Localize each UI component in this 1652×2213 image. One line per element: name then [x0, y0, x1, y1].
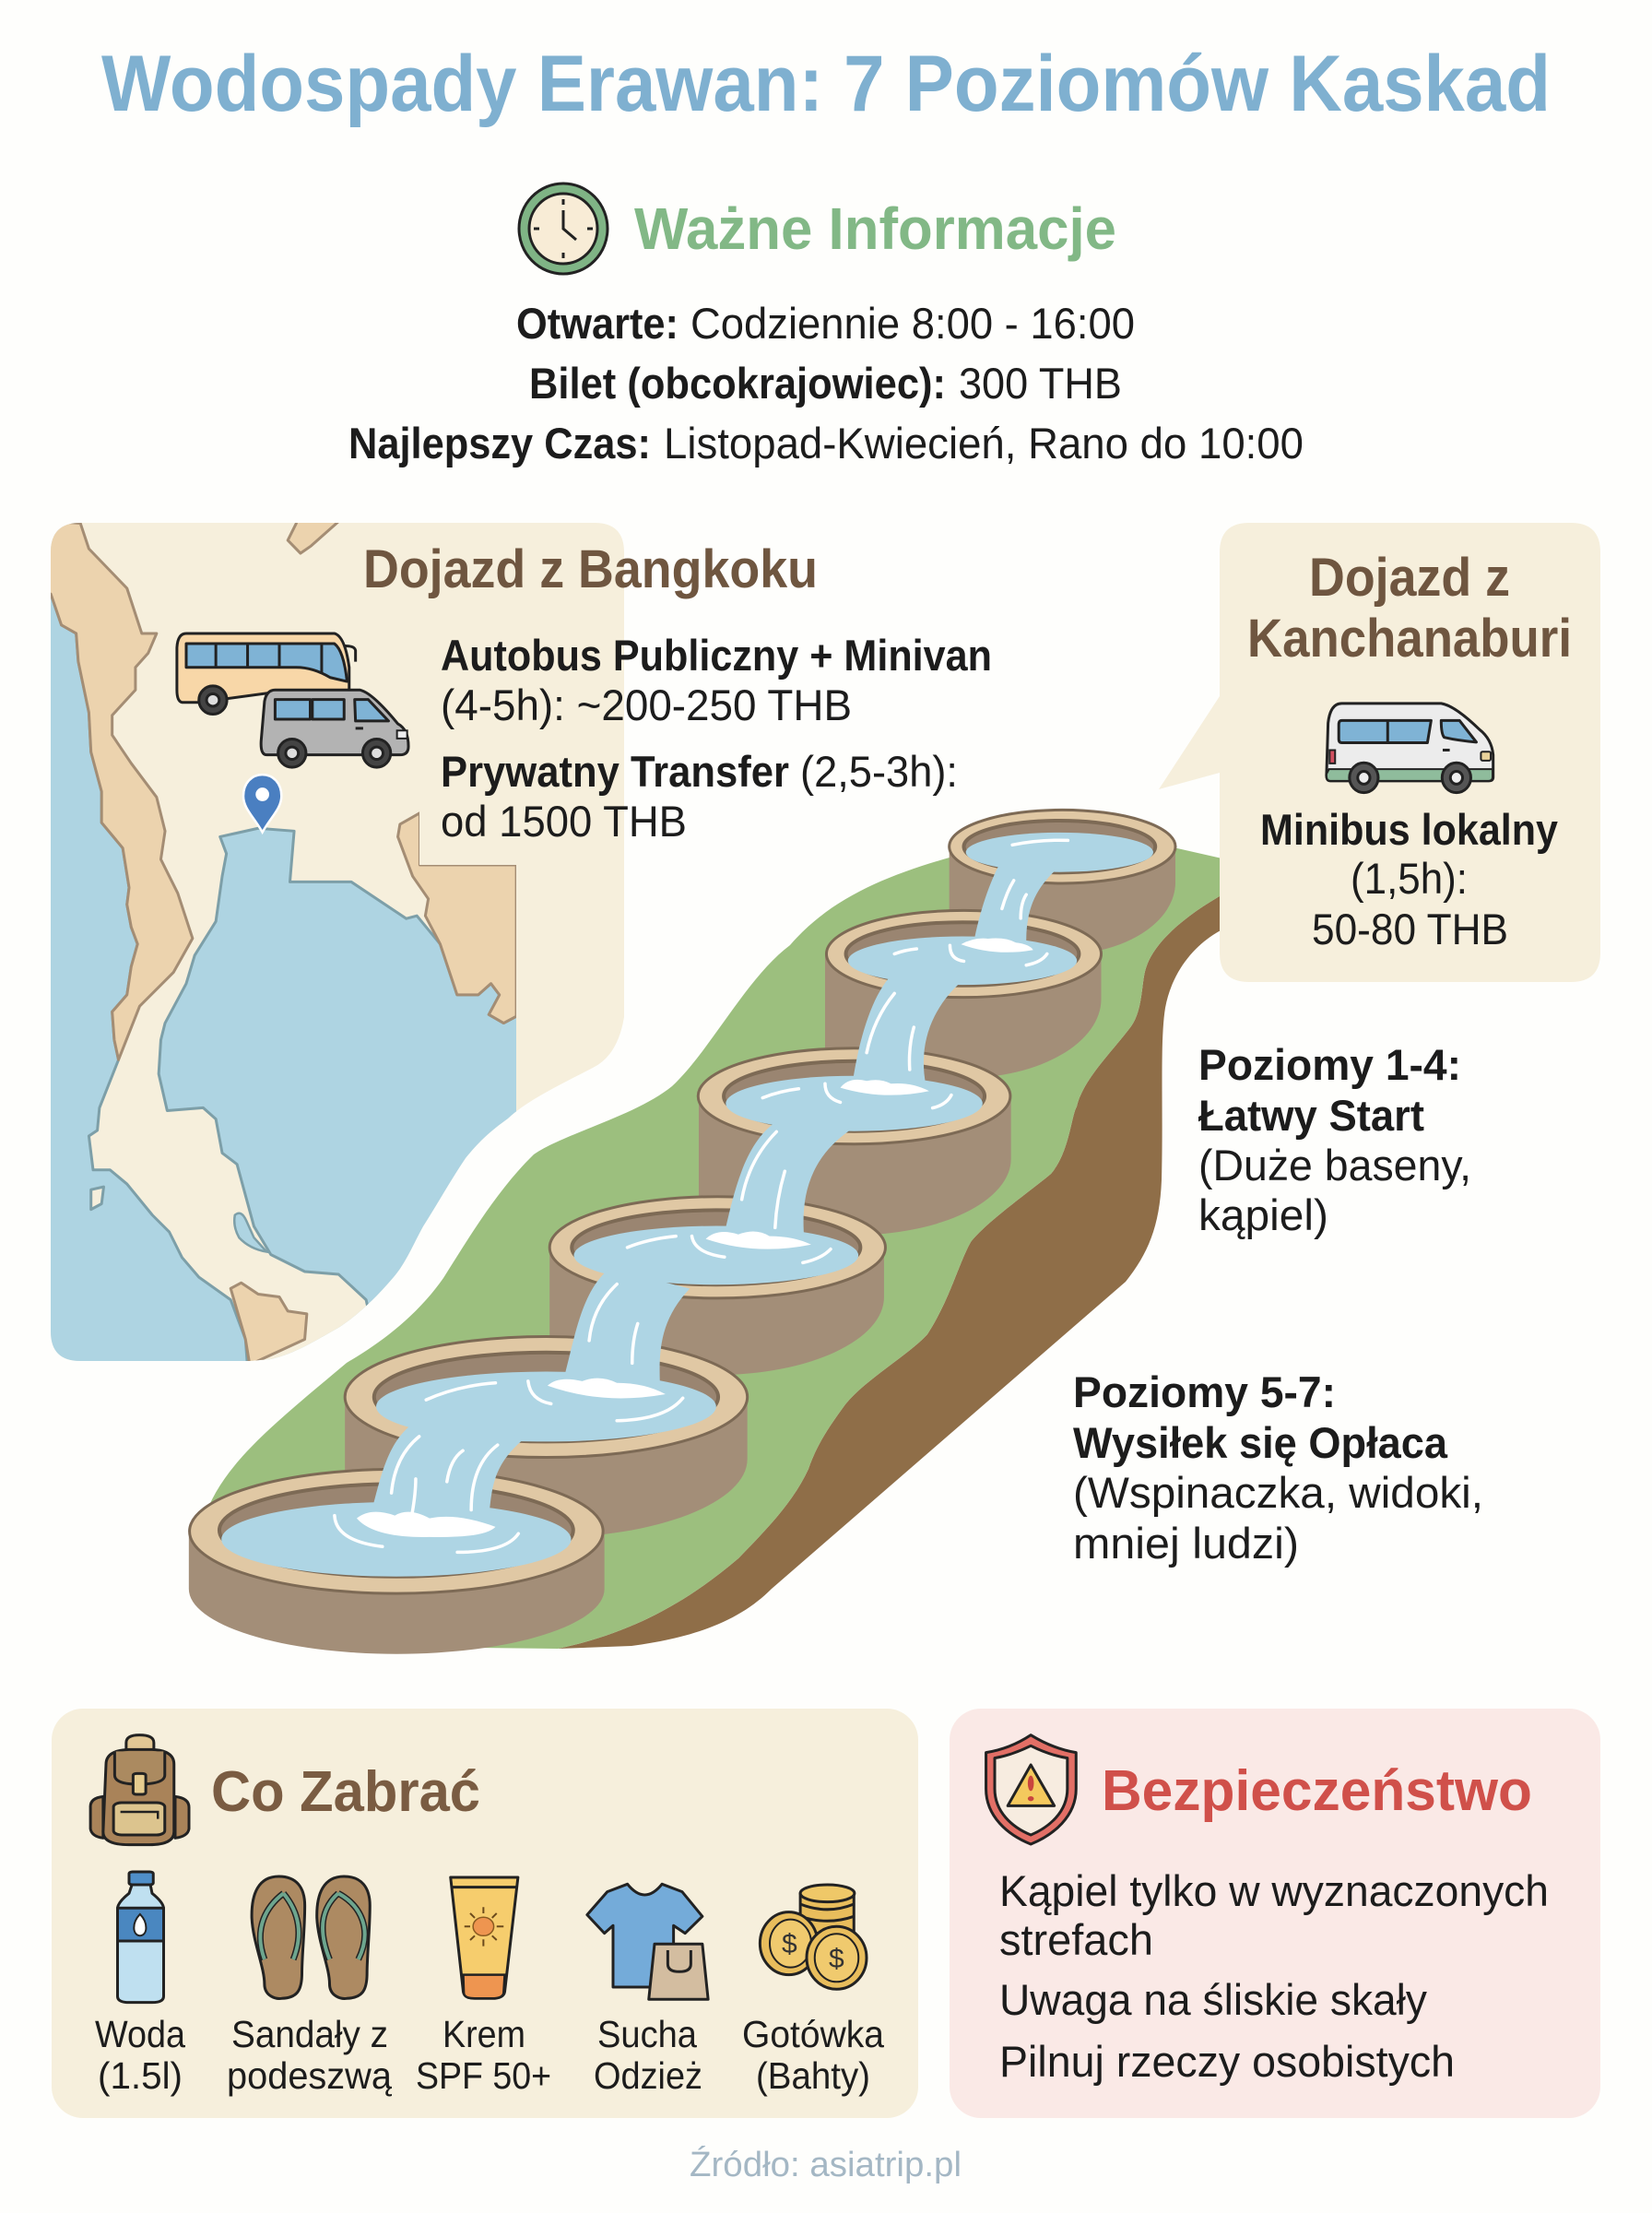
text block: levels 1-4: Łatwy Start: [1198, 1091, 1424, 1140]
item: cash: Gotówka: [742, 2013, 884, 2055]
icon: clock: [519, 183, 608, 274]
pool level 4: [698, 1048, 1011, 1235]
item: sandals: Sandały z: [231, 2013, 388, 2055]
text block: levels 5-7: Poziomy 5-7:: [1073, 1367, 1336, 1416]
waterfall into level 2: [548, 1268, 690, 1398]
text block: levels 1-4: (Duże baseny,: [1198, 1141, 1471, 1189]
icon: location pin: [243, 775, 281, 833]
icon: warning shield: [986, 1735, 1076, 1844]
item: sunscreen: SPF 50+: [416, 2054, 551, 2097]
item: sunscreen: [416, 1877, 551, 2097]
text block: Bangkok options: (2,5-3h):: [800, 747, 958, 796]
waterfall into level 3: [706, 1121, 849, 1249]
heading: from Kanchanaburi: Kanchanaburi: [1247, 609, 1572, 669]
text block: safety rules: Pilnuj rzeczy osobistych: [999, 2037, 1455, 2086]
title: Wodospady Erawan: 7 Poziomów Kaskad: [101, 40, 1551, 128]
heading: important information: Ważne Informacje: [634, 195, 1116, 262]
text block: safety rules: Kąpiel tylko w wyznaczonych: [999, 1866, 1549, 1915]
pool level 3: [549, 1197, 885, 1375]
map of Thailand: [51, 523, 516, 1361]
source credit: Źródło: asiatrip.pl: [690, 2145, 962, 2184]
pool level 5: [825, 910, 1102, 1078]
waterfall into level 5: [961, 859, 1061, 953]
Laos: [286, 523, 339, 555]
text block: opening hours, ticket, best time: Listopad-Kwiecień, Rano do 10:00: [664, 419, 1304, 467]
item: dry clothes: Odzież: [594, 2054, 702, 2097]
text block: minibus details: Minibus lokalny: [1260, 805, 1558, 854]
text block: Bangkok options: Autobus Publiczny + Minivan: [441, 631, 992, 680]
item: cash: [742, 1885, 884, 2097]
text block: levels 5-7: [1073, 1367, 1483, 1568]
text block: opening hours, ticket, best time: Bilet (obcokrajowiec):: [529, 359, 946, 408]
text block: Bangkok options: (4-5h): ~200-250 THB: [441, 680, 852, 729]
text block: opening hours, ticket, best time: 300 THB: [959, 359, 1122, 408]
islands: [91, 1187, 103, 1210]
item: water: (1.5l): [98, 2054, 183, 2097]
chart: cascade of waterfall pools on hillside: [189, 810, 1226, 1654]
text block: minibus details: 50-80 THB: [1312, 905, 1508, 953]
panel: map and route from Bangkok: [42, 498, 992, 1374]
text block: levels 1-4: Poziomy 1-4:: [1198, 1040, 1461, 1089]
text block: levels 1-4: [1198, 1040, 1471, 1239]
waterfall into level 1: [357, 1424, 526, 1537]
item: dry clothes: Sucha: [597, 2013, 697, 2055]
Malaysia: [230, 1283, 307, 1365]
hillside: brown soil: [558, 893, 1226, 1649]
text block: opening hours, ticket, best time: Najlepszy Czas:: [348, 419, 651, 467]
text block: safety rules: [999, 1866, 1549, 2086]
pool level 6: [950, 810, 1175, 954]
item: cash: $: [782, 1929, 797, 1959]
heading: from Bangkok: Dojazd z Bangkoku: [363, 539, 818, 599]
heading: safety: Bezpieczeństwo: [1102, 1759, 1532, 1823]
item: sandals: podeszwą: [227, 2054, 392, 2097]
item: water: Woda: [95, 2013, 185, 2055]
heading: from Kanchanaburi: Dojazd z: [1309, 548, 1510, 608]
text block: safety rules: strefach: [999, 1915, 1153, 1964]
text block: levels 1-4: kąpiel): [1198, 1190, 1328, 1239]
text block: safety rules: Uwaga na śliskie skały: [999, 1975, 1427, 2024]
panel: what to bring: [52, 1709, 918, 2118]
text block: Bangkok options: od 1500 THB: [441, 797, 687, 846]
panel: safety: [950, 1709, 1600, 2118]
item: sandals: [227, 1876, 392, 2097]
text block: opening hours, ticket, best time: Codziennie 8:00 - 16:00: [690, 299, 1135, 348]
icon: minibus: [1327, 704, 1493, 793]
text block: levels 5-7: Wysiłek się Opłaca: [1073, 1418, 1448, 1467]
hillside: green slope: [203, 848, 1226, 1649]
heading: from Kanchanaburi: [1247, 548, 1572, 669]
text block: opening hours, ticket, best time: [348, 299, 1304, 467]
heading: what to bring: Co Zabrać: [211, 1760, 480, 1824]
item: cash: $: [829, 1944, 844, 1974]
item: dry clothes: [587, 1884, 708, 2097]
panel: from Kanchanaburi: [1159, 523, 1600, 982]
pool level 1: [189, 1469, 605, 1654]
text block: Bangkok options: [441, 631, 992, 846]
icon: backpack: [90, 1735, 189, 1845]
pool level 2: [345, 1337, 748, 1537]
text block: minibus details: [1260, 805, 1558, 953]
text block: Bangkok options: Prywatny Transfer: [441, 747, 789, 796]
text block: levels 5-7: (Wspinaczka, widoki,: [1073, 1468, 1483, 1517]
icon: bus and minivan: [177, 633, 408, 767]
waterfall into level 4: [841, 973, 967, 1095]
item: sunscreen: Krem: [442, 2013, 525, 2055]
Cambodia: [398, 813, 516, 1024]
item: cash: (Bahty): [756, 2054, 870, 2097]
text block: minibus details: (1,5h):: [1351, 854, 1468, 903]
Myanmar: [42, 520, 193, 1059]
text block: opening hours, ticket, best time: Otwarte:: [516, 299, 678, 348]
text block: levels 5-7: mniej ludzi): [1073, 1519, 1299, 1568]
item: water: [95, 1872, 185, 2097]
